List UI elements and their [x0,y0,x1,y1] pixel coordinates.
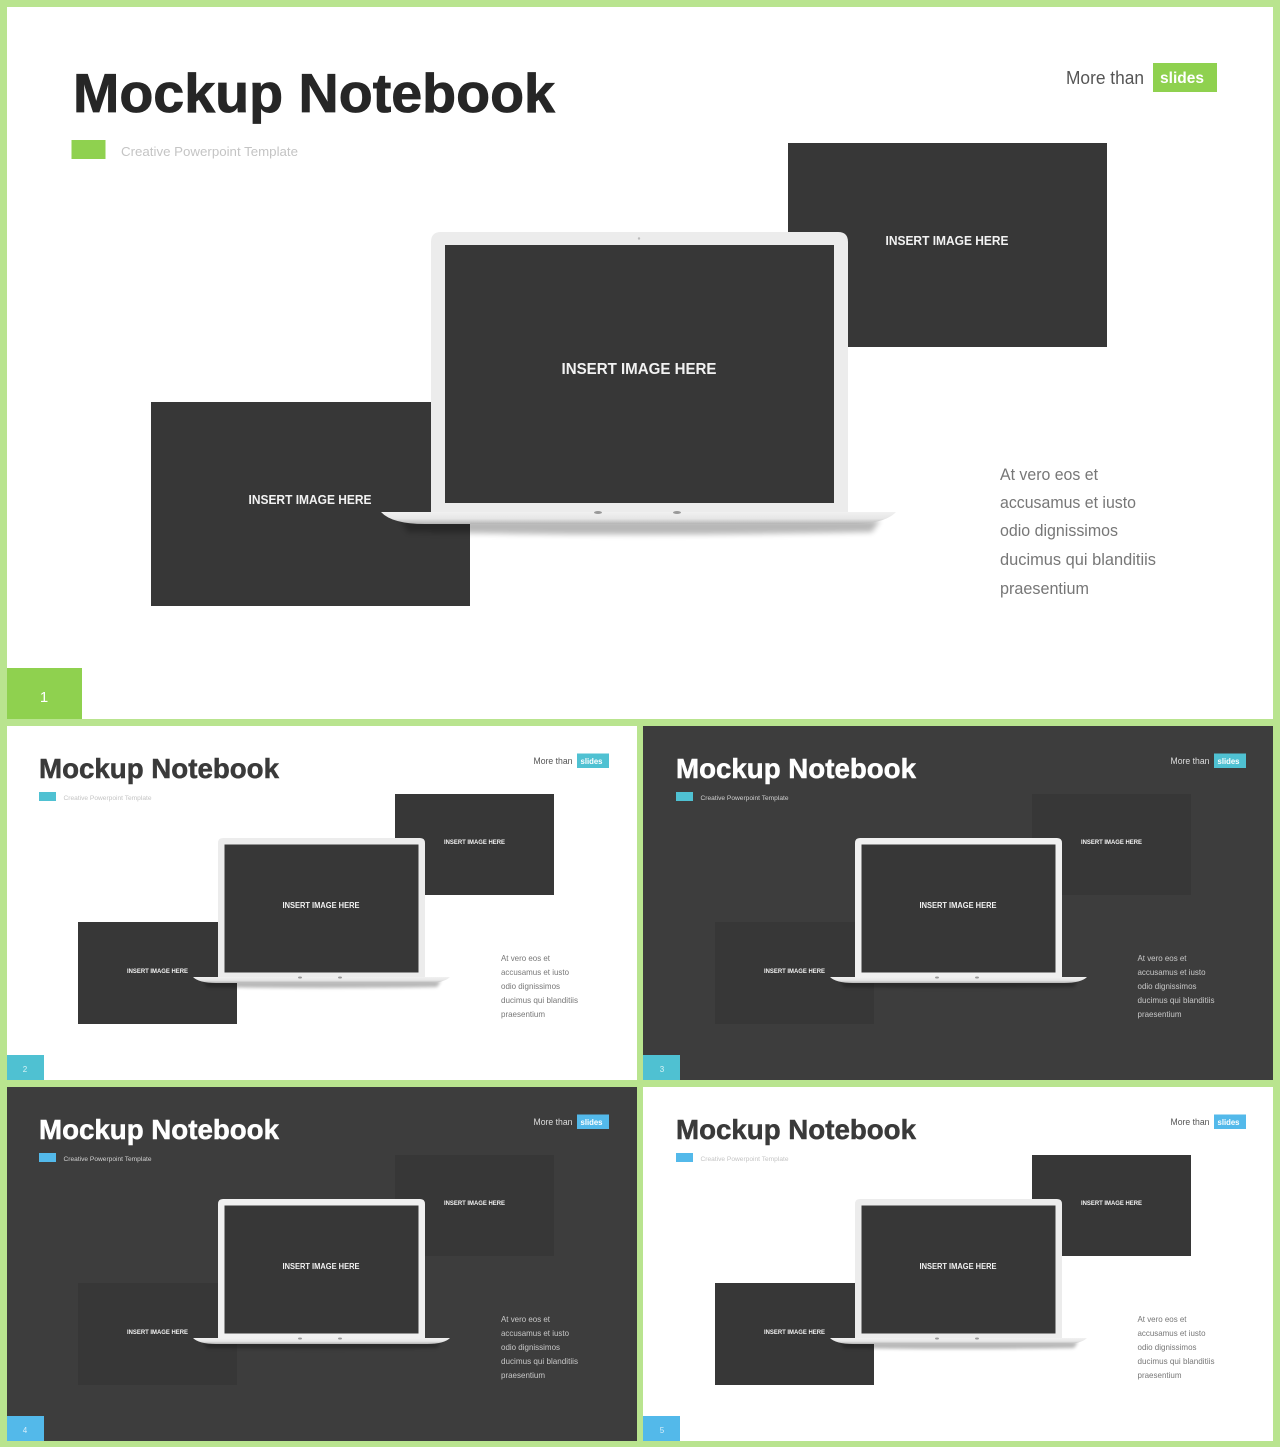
title: Mockup Notebook [73,62,555,124]
body text: At vero eos et [1000,466,1098,484]
badge [534,1114,609,1129]
body text [501,1315,578,1380]
image placeholder: bottom left: INSERT IMAGE HERE [127,968,188,975]
body text: At vero eos et [1138,954,1187,963]
body text: ducimus qui blanditiis [501,1357,578,1366]
laptop mockup [830,1199,1087,1349]
image placeholder: bottom left: INSERT IMAGE HERE [764,968,825,975]
body text: odio dignissimos [1138,1343,1196,1352]
body text: praesentium [1138,1010,1182,1019]
title: Mockup Notebook [39,1114,280,1145]
page number box [643,1416,680,1441]
laptop mockup: INSERT IMAGE HERE [920,901,996,910]
image placeholder: top right: INSERT IMAGE HERE [444,1200,505,1207]
body text [501,954,578,1019]
panel: slide 1 large white [7,7,1273,719]
page number box: 2 [23,1065,28,1074]
badge [1170,754,1246,768]
panel: slide 5 white blue [643,1087,1273,1441]
laptop mockup [193,1199,450,1349]
subtitle: Creative Powerpoint Template [64,795,152,802]
laptop mockup: INSERT IMAGE HERE [920,1262,996,1271]
body text [1000,466,1156,598]
badge: More than [534,1117,572,1127]
body text [1138,954,1214,1019]
title: Mockup Notebook [39,753,280,784]
badge: More than [534,756,572,766]
accent rectangle [72,140,106,159]
badge: More than [1170,1117,1210,1127]
badge [534,754,609,768]
accent rectangle [676,1153,693,1162]
image placeholder: bottom left: INSERT IMAGE HERE [127,1329,188,1336]
image placeholder: top right: INSERT IMAGE HERE [444,839,505,846]
body text: ducimus qui blanditiis [501,996,578,1005]
panel: slide 4 dark blue [7,1087,637,1441]
page number box [7,1416,44,1441]
body text: praesentium [501,1371,545,1380]
body text: At vero eos et [501,1315,551,1324]
badge: slides [580,757,603,766]
badge [1170,1114,1246,1129]
image placeholder: top right: INSERT IMAGE HERE [1081,839,1142,846]
image placeholder: bottom left [715,1283,874,1385]
badge: slides [580,1118,603,1127]
badge: More than [1170,756,1210,766]
page number box: 3 [660,1065,665,1074]
image placeholder: top right: INSERT IMAGE HERE [1081,1200,1142,1207]
subtitle: Creative Powerpoint Template [700,795,789,802]
body text: praesentium [1000,580,1089,598]
body text: praesentium [501,1010,545,1019]
badge: slides [1218,1118,1240,1127]
badge: more than slides [1066,63,1217,92]
badge: more than slides: slides [1160,70,1204,87]
laptop mockup [381,232,896,534]
body text: ducimus qui blanditiis [1138,996,1214,1005]
image placeholder: bottom left [78,1283,237,1385]
body text: At vero eos et [1138,1315,1187,1324]
laptop mockup [193,838,450,988]
page number box [7,1055,44,1080]
accent rectangle [39,1153,56,1162]
page number box [7,668,82,719]
image placeholder: bottom left: INSERT IMAGE HERE [248,493,372,507]
badge: more than slides: More than [1066,68,1144,88]
page number box: 5 [660,1426,665,1435]
laptop mockup: INSERT IMAGE HERE [562,361,716,378]
laptop mockup [830,838,1087,988]
accent rectangle [676,792,693,801]
accent rectangle [39,792,56,801]
body text: ducimus qui blanditiis [1000,551,1156,569]
body text: accusamus et iusto [501,968,569,977]
body text: accusamus et iusto [1138,968,1206,977]
image placeholder: bottom left [78,922,237,1024]
subtitle: Creative Powerpoint Template [64,1156,152,1163]
body text: odio dignissimos [1000,522,1118,540]
body text: odio dignissimos [1138,982,1196,991]
body text: At vero eos et [501,954,551,963]
title: Mockup Notebook [676,753,917,784]
body text: ducimus qui blanditiis [1138,1357,1214,1366]
laptop mockup: INSERT IMAGE HERE [282,901,360,910]
image placeholder: top right [1032,1155,1191,1256]
image placeholder: bottom left [715,922,874,1024]
page number box [643,1055,680,1080]
laptop mockup: INSERT IMAGE HERE [282,1262,360,1271]
body text: odio dignissimos [501,1343,560,1352]
image placeholder: top right [788,143,1107,347]
body text: praesentium [1138,1371,1182,1380]
body text: accusamus et iusto [1000,494,1136,512]
panel: slide 2 white teal [7,726,637,1080]
body text: accusamus et iusto [1138,1329,1206,1338]
page number box: 4 [23,1426,28,1435]
image placeholder: bottom left: INSERT IMAGE HERE [764,1329,825,1336]
image placeholder: top right [395,1155,554,1256]
badge: slides [1218,757,1240,766]
image placeholder: bottom left [151,402,470,606]
subtitle: Creative Powerpoint Template [700,1156,789,1163]
body text: accusamus et iusto [501,1329,569,1338]
subtitle: Creative Powerpoint Template [121,144,298,159]
image placeholder: top right [395,794,554,895]
title: Mockup Notebook [676,1114,917,1145]
body text [1138,1315,1214,1380]
body text: odio dignissimos [501,982,560,991]
image placeholder: top right [1032,794,1191,895]
panel: slide 3 dark teal [643,726,1273,1080]
page number box: 1 [40,689,48,706]
image placeholder: top right: INSERT IMAGE HERE [886,234,1008,248]
